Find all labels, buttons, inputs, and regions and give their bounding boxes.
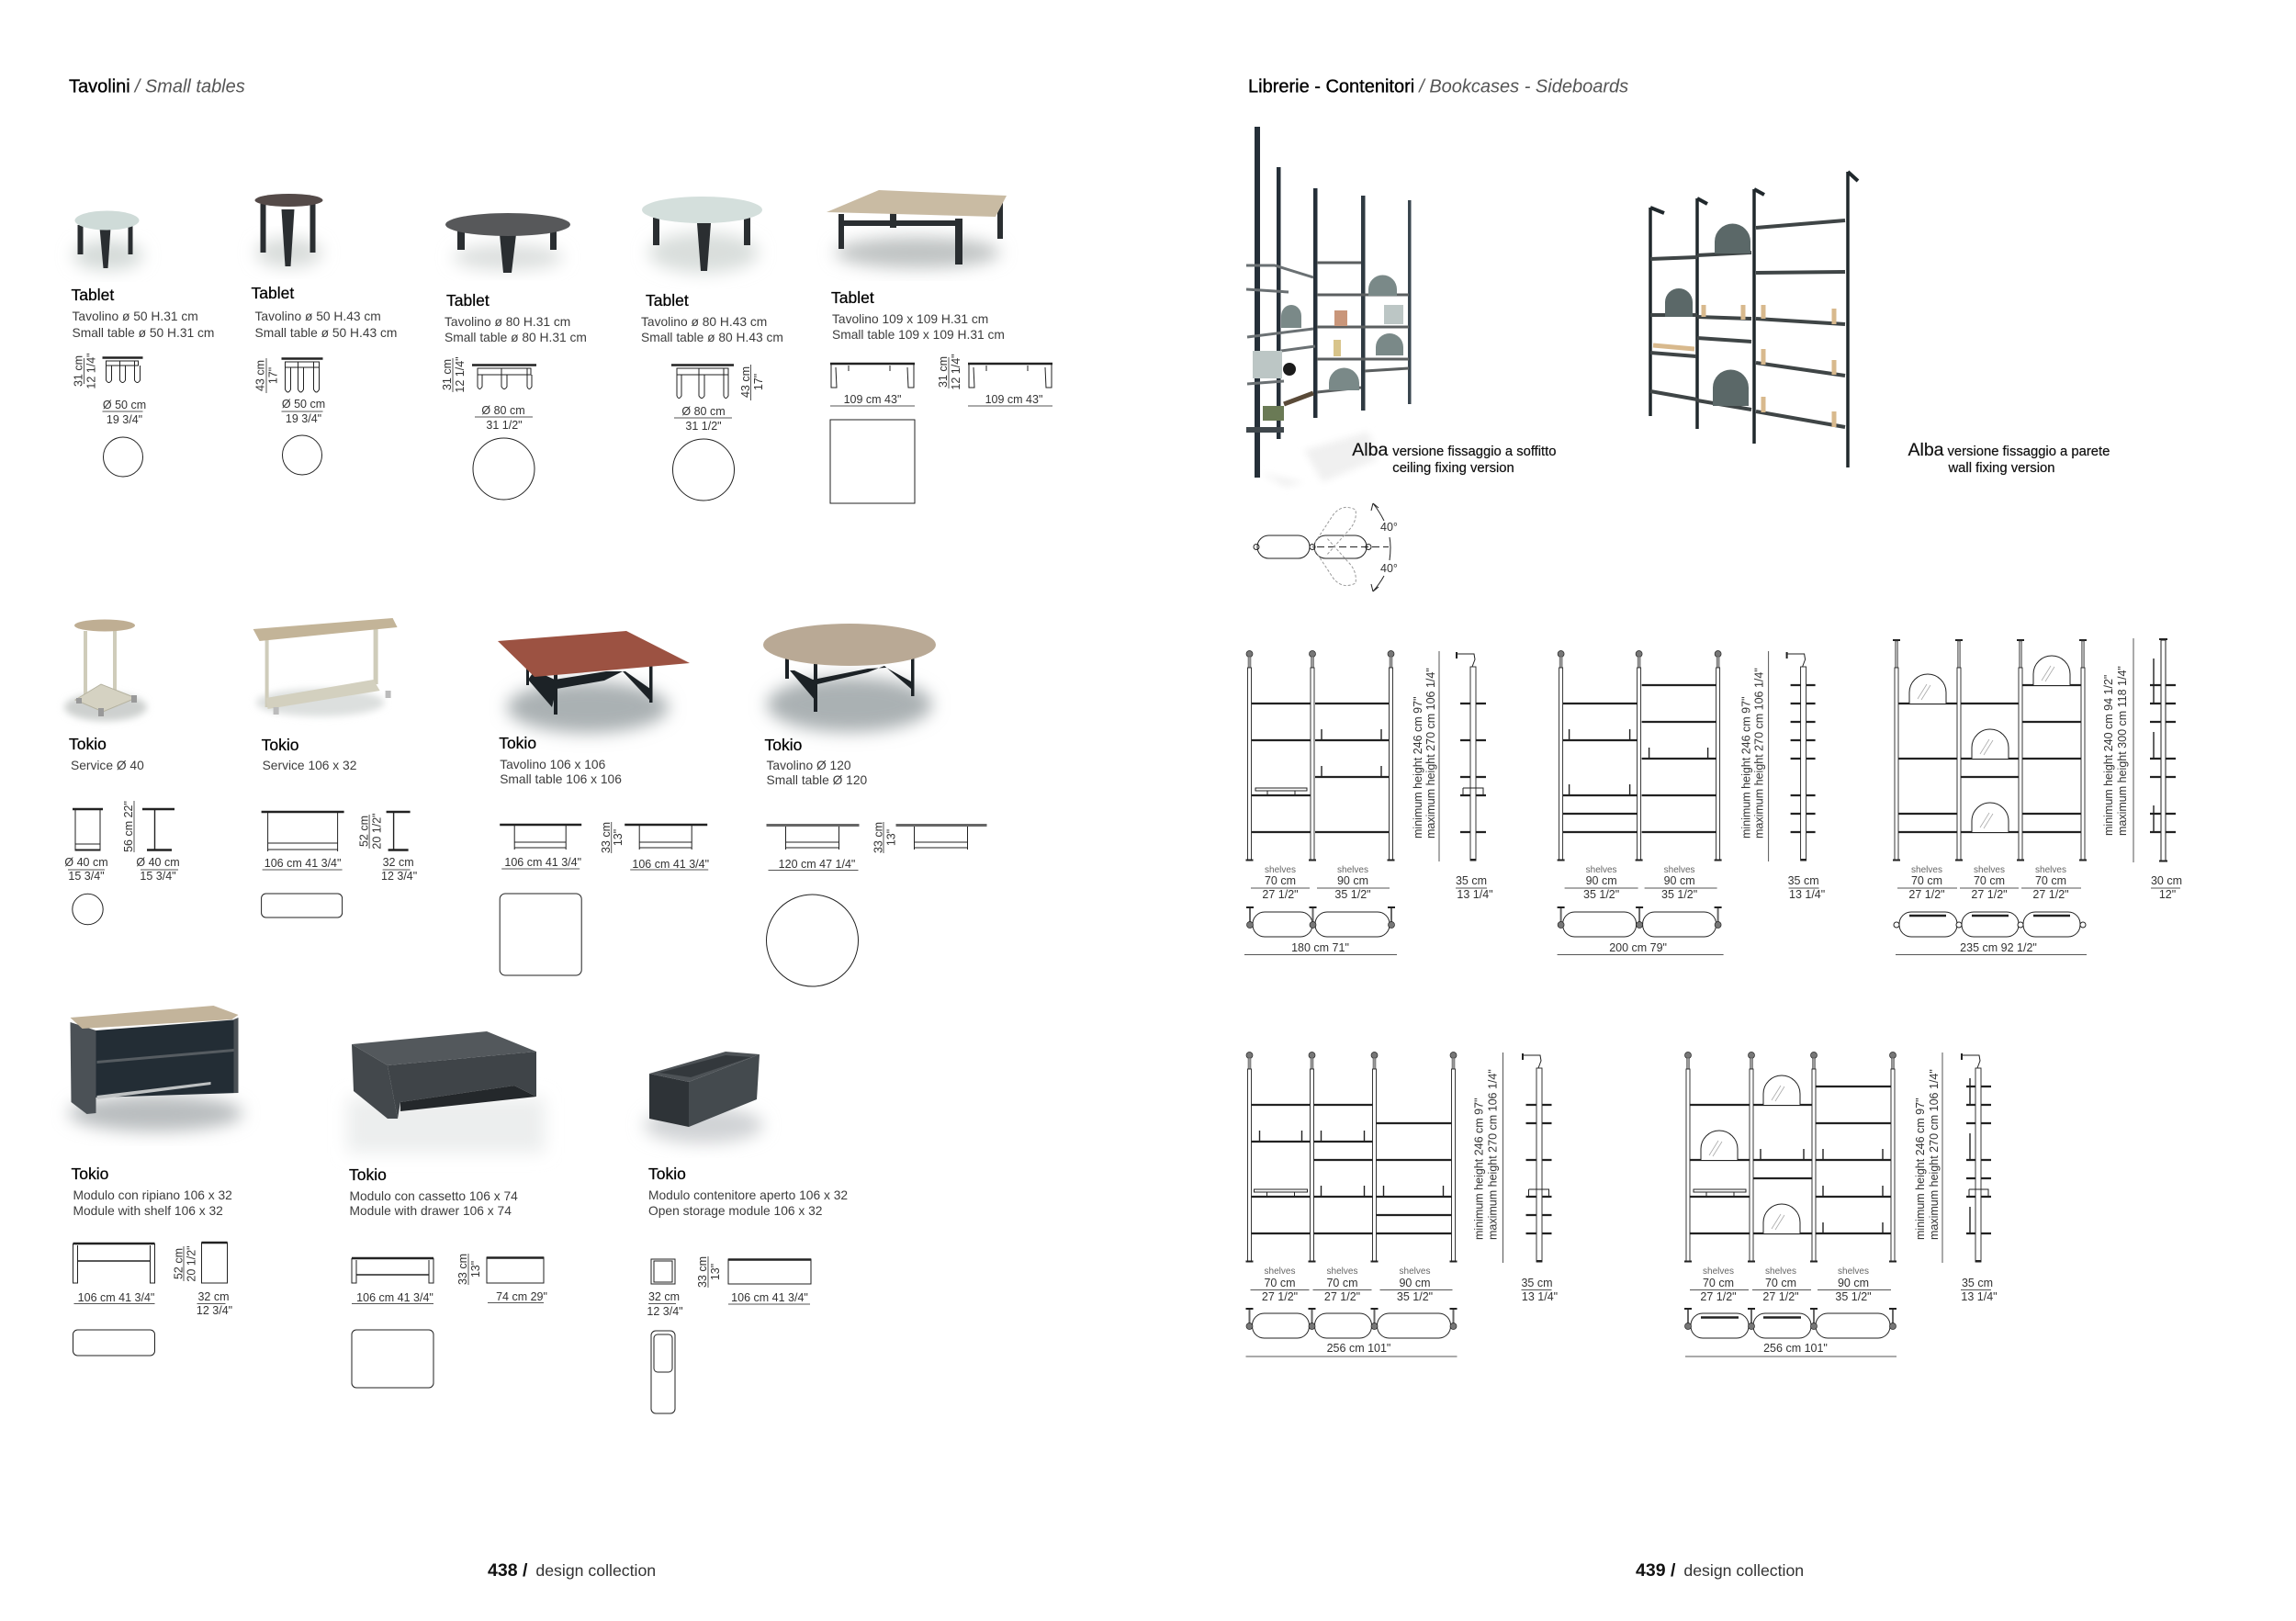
drawing: side view and dimensions: 17" bbox=[752, 374, 765, 390]
drawing: bookcase 180 cm: shelves bbox=[1337, 865, 1368, 875]
caption: Alba ceiling fixing: versione fissaggio a soffitto bbox=[1392, 445, 1557, 459]
drawing: front and side views: 13" bbox=[709, 1264, 722, 1280]
drawing: bookcase 180 cm: 13 1/4" bbox=[1457, 888, 1493, 901]
drawing: side view and dimensions: 12 1/4" bbox=[84, 353, 97, 389]
drawing: two side views: 13" bbox=[885, 829, 898, 846]
drawing: bookcase 180 cm: shelves bbox=[1265, 865, 1296, 875]
drawing: bookcase 235 cm with mirrors: 30 cm bbox=[2151, 874, 2182, 887]
drawing: side view and dimensions bbox=[671, 365, 765, 433]
drawing: side view and dimensions: 31 cm bbox=[72, 355, 84, 387]
caption: Alba wall fixing: Alba bbox=[1908, 440, 1944, 460]
heading: Librerie - Contenitori / Bookcases - Sideboards: Librerie - Contenitori/ Bookcases - Sideboards bbox=[1248, 77, 1628, 97]
drawing: side view and dimensions: Ø 50 cm bbox=[103, 399, 146, 411]
drawing: bookcase 256 cm with mirrors: shelves bbox=[1703, 1266, 1734, 1277]
drawing: two side views: 33 cm bbox=[872, 822, 885, 853]
product: Tablet 109 x 109 bbox=[827, 190, 1052, 503]
drawing: two side views and dimensions: 31 cm bbox=[937, 356, 950, 388]
product: Tablet 80 H31: Small table ø 80 H.31 cm bbox=[445, 331, 587, 344]
product: Tokio open storage module: Tokio bbox=[648, 1165, 686, 1183]
plan: circle bbox=[672, 439, 735, 501]
product: Tablet 109 x 109: Tablet bbox=[831, 288, 874, 307]
product: Tablet 50 H43: Tablet bbox=[252, 284, 294, 302]
drawing: bookcase 256 cm with mirrors: 70 cm bbox=[1703, 1277, 1734, 1289]
drawing: bookcase 256 cm: 27 1/2" bbox=[1324, 1290, 1360, 1303]
photo: module with shelf bbox=[68, 1006, 242, 1131]
product: Tokio Ø 120: Tokio bbox=[764, 736, 802, 754]
plan: circle bbox=[103, 437, 143, 477]
drawing: front and side views: 56 cm 22" bbox=[122, 801, 135, 852]
drawing: front and side views: 20 1/2" bbox=[186, 1245, 198, 1282]
photo: open storage module bbox=[644, 1052, 763, 1143]
photo: round wood table bbox=[763, 624, 936, 732]
drawing: bookcase 235 cm with mirrors: maximum height 300 cm 118 1/4" bbox=[2116, 666, 2129, 836]
product: Tokio Service 40 bbox=[64, 619, 180, 925]
drawing: bookcase 180 cm: minimum height 246 cm 97" bbox=[1412, 696, 1424, 839]
drawing: bookcase 256 cm with mirrors: minimum height 246 cm 97" bbox=[1914, 1098, 1927, 1240]
drawing: side view and dimensions bbox=[253, 358, 325, 425]
drawing: front and side views: 52 cm bbox=[358, 816, 371, 847]
drawing: bookcase 256 cm with mirrors: 27 1/2" bbox=[1700, 1290, 1737, 1303]
drawing: bookcase 235 cm with mirrors: shelves bbox=[1974, 865, 2005, 875]
drawing: bookcase 200 cm: 35 cm bbox=[1788, 874, 1819, 887]
photo: round side table on pole bbox=[64, 619, 147, 721]
drawing: front and side views: 15 3/4" bbox=[140, 870, 176, 883]
product: Tablet 50 H31 bbox=[72, 211, 214, 477]
diagram: rotation 40 degrees bbox=[1254, 503, 1398, 591]
drawing: bookcase 200 cm: 90 cm bbox=[1664, 874, 1695, 887]
product: Tablet 50 H31: Tavolino ø 50 H.31 cm bbox=[72, 310, 198, 323]
drawing: front and side views bbox=[352, 1254, 547, 1304]
product: Tokio Ø 120 bbox=[763, 624, 986, 986]
diagram: rotation 40 degrees: 40° bbox=[1380, 562, 1398, 575]
drawing: front and side views: 32 cm bbox=[648, 1290, 680, 1303]
drawing: bookcase 256 cm: shelves bbox=[1265, 1266, 1295, 1277]
product: Tokio open storage module bbox=[644, 1052, 848, 1413]
drawing: bookcase 235 cm with mirrors: 70 cm bbox=[1974, 874, 2005, 887]
drawing: bookcase 256 cm with mirrors: shelves bbox=[1838, 1266, 1869, 1277]
drawing: bookcase 235 cm with mirrors: 235 cm 92 1/2" bbox=[1960, 941, 2037, 954]
drawing: bookcase 200 cm: shelves bbox=[1586, 865, 1617, 875]
drawing: side view and dimensions: Ø 50 cm bbox=[282, 398, 325, 411]
drawing: bookcase 256 cm bbox=[1245, 1053, 1558, 1356]
drawing: bookcase 256 cm: 256 cm 101" bbox=[1327, 1342, 1390, 1355]
drawing: side view and dimensions: 31 1/2" bbox=[486, 419, 523, 432]
drawing: side view and dimensions: 19 3/4" bbox=[286, 412, 321, 425]
drawing: bookcase 256 cm: 13 1/4" bbox=[1522, 1290, 1558, 1303]
drawing: side view and dimensions: Ø 80 cm bbox=[681, 405, 726, 418]
product: Tokio Ø 120: Tavolino Ø 120 bbox=[766, 759, 851, 772]
drawing: front and side views: 106 cm 41 3/4" bbox=[356, 1291, 433, 1304]
product: Tokio Service 40: Tokio bbox=[69, 735, 107, 753]
drawing: bookcase 200 cm: 35 1/2" bbox=[1583, 888, 1619, 901]
drawing: side view and dimensions: 31 1/2" bbox=[685, 420, 722, 433]
drawing: two side views: 120 cm 47 1/4" bbox=[779, 858, 855, 871]
drawing: bookcase 180 cm: 27 1/2" bbox=[1262, 888, 1299, 901]
drawing: bookcase 256 cm: 35 cm bbox=[1521, 1277, 1553, 1289]
drawing: side view and dimensions bbox=[441, 356, 536, 432]
product: Tokio 106 x 106: Small table 106 x 106 bbox=[500, 772, 622, 786]
product: Tablet 50 H43: Small table ø 50 H.43 cm bbox=[255, 326, 397, 340]
drawing: bookcase 235 cm with mirrors: minimum height 240 cm 94 1/2" bbox=[2102, 675, 2115, 836]
page: bookcases sideboards bbox=[1244, 77, 2182, 1581]
product: Tablet 80 H43: Small table ø 80 H.43 cm bbox=[641, 331, 783, 344]
drawing: bookcase 235 cm with mirrors: 27 1/2" bbox=[1971, 888, 2008, 901]
photo: square wood table bbox=[827, 190, 1007, 268]
drawing: side view and dimensions: 31 cm bbox=[441, 359, 454, 390]
drawing: front and side views: 52 cm bbox=[173, 1248, 186, 1279]
product: Tablet 80 H31 bbox=[441, 213, 587, 500]
photo: module with drawer bbox=[347, 1031, 545, 1153]
drawing: bookcase 256 cm: shelves bbox=[1327, 1266, 1357, 1277]
drawing: bookcase 180 cm: maximum height 270 cm 106 1/4" bbox=[1424, 668, 1437, 839]
product: Tokio open storage module: Open storage module 106 x 32 bbox=[648, 1204, 822, 1218]
drawing: two side views bbox=[766, 822, 986, 871]
product: Tokio module with shelf: Modulo con ripiano 106 x 32 bbox=[73, 1188, 232, 1202]
drawing: bookcase 256 cm with mirrors: shelves bbox=[1765, 1266, 1796, 1277]
drawing: bookcase 256 cm: 90 cm bbox=[1399, 1277, 1431, 1289]
drawing: front and side views: 12 3/4" bbox=[197, 1304, 232, 1317]
drawing: side view and dimensions bbox=[72, 353, 146, 426]
drawing: front and side views: Ø 40 cm bbox=[64, 856, 108, 869]
drawing: bookcase 200 cm: shelves bbox=[1664, 865, 1695, 875]
drawing: bookcase 256 cm with mirrors: maximum height 270 cm 106 1/4" bbox=[1928, 1069, 1941, 1240]
photo: low dark round table bbox=[445, 213, 570, 273]
drawing: two side views: 33 cm bbox=[600, 822, 613, 853]
product: Tablet 109 x 109: Small table 109 x 109 H.31 cm bbox=[832, 328, 1005, 342]
drawing: two side views and dimensions: 12 1/4" bbox=[950, 354, 962, 390]
drawing: bookcase 180 cm: 180 cm 71" bbox=[1291, 941, 1349, 954]
product: Tablet 80 H43: Tavolino ø 80 H.43 cm bbox=[641, 315, 767, 329]
product: Tokio module with drawer: Tokio bbox=[349, 1165, 387, 1184]
product: Tablet 80 H43: Tablet bbox=[646, 291, 689, 310]
drawing: bookcase 235 cm with mirrors: 27 1/2" bbox=[2032, 888, 2069, 901]
drawing: bookcase 180 cm: 35 1/2" bbox=[1334, 888, 1371, 901]
caption: Alba ceiling fixing bbox=[1352, 440, 1557, 476]
caption: Alba wall fixing bbox=[1908, 440, 2110, 476]
plan: rounded rectangle bbox=[262, 894, 343, 917]
drawing: bookcase 256 cm: shelves bbox=[1400, 1266, 1430, 1277]
drawing: side view and dimensions: 43 cm bbox=[253, 360, 266, 391]
drawing: side view and dimensions: 19 3/4" bbox=[107, 413, 142, 426]
product: Tokio module with shelf: Tokio bbox=[72, 1165, 108, 1183]
product: Tokio 106 x 106: Tavolino 106 x 106 bbox=[500, 758, 606, 771]
drawing: front and side views: 32 cm bbox=[197, 1290, 230, 1303]
product: Tokio Ø 120: Small table Ø 120 bbox=[766, 773, 867, 787]
caption: Alba wall fixing: wall fixing version bbox=[1947, 461, 2054, 476]
drawing: bookcase 256 cm with mirrors: 27 1/2" bbox=[1762, 1290, 1799, 1303]
caption: Alba ceiling fixing: ceiling fixing version bbox=[1392, 461, 1514, 476]
drawing: bookcase 256 cm: 35 1/2" bbox=[1397, 1290, 1433, 1303]
drawing: two side views and dimensions: 109 cm 43" bbox=[985, 393, 1042, 406]
drawing: front and side views: Ø 40 cm bbox=[136, 856, 180, 869]
drawing: bookcase 200 cm: 90 cm bbox=[1586, 874, 1617, 887]
caption: Alba ceiling fixing: Alba bbox=[1352, 440, 1388, 460]
drawing: bookcase 256 cm: minimum height 246 cm 97" bbox=[1473, 1098, 1486, 1240]
drawing: front and side views: 20 1/2" bbox=[371, 813, 384, 850]
drawing: side view and dimensions: 12 1/4" bbox=[454, 356, 467, 393]
footer: page 438: 438 / design collection bbox=[488, 1560, 656, 1581]
drawing: bookcase 200 cm: 35 1/2" bbox=[1661, 888, 1697, 901]
product: Tokio module with drawer: Modulo con cassetto 106 x 74 bbox=[349, 1189, 518, 1203]
plan: rounded square bbox=[500, 894, 581, 975]
drawing: side view and dimensions: 43 cm bbox=[739, 366, 752, 398]
photo: square red wood table bbox=[498, 631, 690, 733]
drawing: two side views: 106 cm 41 3/4" bbox=[504, 856, 581, 869]
drawing: bookcase 235 cm with mirrors: shelves bbox=[2035, 865, 2066, 875]
drawing: front and side views: 33 cm bbox=[456, 1254, 469, 1285]
product: Tablet 80 H43 bbox=[641, 197, 783, 501]
drawing: bookcase 256 cm with mirrors: 70 cm bbox=[1765, 1277, 1796, 1289]
drawing: front and side views: 13" bbox=[469, 1261, 482, 1278]
diagram: rotation 40 degrees: 40° bbox=[1380, 521, 1398, 534]
plan: rounded rectangle bbox=[352, 1330, 433, 1388]
drawing: side view and dimensions: Ø 80 cm bbox=[481, 404, 525, 417]
drawing: front and side views: 106 cm 41 3/4" bbox=[731, 1291, 808, 1304]
drawing: front and side views bbox=[64, 801, 180, 883]
product: Tokio open storage module: Modulo contenitore aperto 106 x 32 bbox=[648, 1188, 848, 1202]
drawing: two side views: 13" bbox=[612, 829, 625, 846]
product: Tablet 50 H43: Tavolino ø 50 H.43 cm bbox=[255, 310, 381, 323]
page: small tables bbox=[64, 77, 1052, 1581]
drawing: front and side views: 74 cm 29" bbox=[496, 1290, 547, 1303]
drawing: bookcase 235 cm with mirrors: 12" bbox=[2159, 888, 2176, 901]
drawing: bookcase 235 cm with mirrors bbox=[1893, 638, 2182, 955]
drawing: bookcase 235 cm with mirrors: 27 1/2" bbox=[1908, 888, 1945, 901]
drawing: bookcase 200 cm: maximum height 270 cm 106 1/4" bbox=[1753, 668, 1766, 839]
product: Tablet 50 H31: Tablet bbox=[72, 286, 114, 304]
drawing: front and side views: 33 cm bbox=[696, 1256, 709, 1288]
heading: Tavolini / Small tables: Tavolini/ Small tables bbox=[69, 77, 245, 97]
plan: tall rounded rectangle with inner opening bbox=[651, 1331, 675, 1413]
drawing: two side views and dimensions bbox=[830, 354, 1052, 406]
product: Tokio 106 x 106: Tokio bbox=[499, 734, 536, 752]
product: Tokio Service 106 x 32 bbox=[253, 618, 417, 917]
plan: circle bbox=[283, 435, 321, 475]
drawing: bookcase 180 cm bbox=[1244, 650, 1493, 955]
drawing: front and side views bbox=[262, 812, 417, 883]
drawing: side view and dimensions: 17" bbox=[266, 367, 279, 384]
product: Tokio module with drawer bbox=[347, 1031, 547, 1388]
product: Tablet 80 H31: Tavolino ø 80 H.31 cm bbox=[445, 315, 570, 329]
photo: tall glass round table bbox=[642, 197, 762, 273]
drawing: bookcase 256 cm with mirrors: 35 1/2" bbox=[1835, 1290, 1872, 1303]
drawing: front and side views bbox=[73, 1243, 232, 1317]
drawing: front and side views: 32 cm bbox=[383, 856, 414, 869]
plan: circle bbox=[766, 895, 858, 986]
drawing: bookcase 180 cm: 90 cm bbox=[1337, 874, 1368, 887]
drawing: front and side views bbox=[647, 1256, 811, 1318]
drawing: two side views bbox=[500, 822, 709, 871]
drawing: bookcase 200 cm: minimum height 246 cm 97" bbox=[1740, 696, 1753, 839]
photo: Alba wall fixing bookcase bbox=[1650, 172, 1858, 467]
product: Tablet 50 H43 bbox=[252, 194, 397, 475]
drawing: front and side views: 15 3/4" bbox=[68, 870, 105, 883]
drawing: bookcase 256 cm with mirrors: 13 1/4" bbox=[1961, 1290, 1998, 1303]
drawing: bookcase 256 cm with mirrors: 90 cm bbox=[1838, 1277, 1869, 1289]
drawing: bookcase 200 cm: 200 cm 79" bbox=[1609, 941, 1667, 954]
footer: page 439: 439 / design collection bbox=[1636, 1560, 1804, 1581]
plan: circle bbox=[73, 894, 103, 925]
drawing: bookcase 235 cm with mirrors: 70 cm bbox=[2035, 874, 2066, 887]
product: Tokio module with drawer: Module with drawer 106 x 74 bbox=[349, 1204, 512, 1218]
drawing: front and side views: 12 3/4" bbox=[647, 1305, 683, 1318]
drawing: bookcase 256 cm: 70 cm bbox=[1264, 1277, 1296, 1289]
plan: square bbox=[830, 420, 915, 503]
product: Tokio Service 40: Service Ø 40 bbox=[71, 759, 144, 772]
photo: small tall round table bbox=[255, 194, 323, 267]
product: Tokio module with shelf bbox=[68, 1006, 242, 1356]
drawing: bookcase 256 cm with mirrors: 35 cm bbox=[1962, 1277, 1993, 1289]
drawing: front and side views: 12 3/4" bbox=[381, 870, 417, 883]
drawing: bookcase 235 cm with mirrors: shelves bbox=[1911, 865, 1942, 875]
drawing: bookcase 180 cm: 35 cm bbox=[1456, 874, 1487, 887]
drawing: bookcase 256 cm with mirrors bbox=[1684, 1053, 1998, 1356]
drawing: two side views: 106 cm 41 3/4" bbox=[632, 858, 709, 871]
product: Tablet 109 x 109: Tavolino 109 x 109 H.31 cm bbox=[832, 312, 988, 326]
drawing: bookcase 235 cm with mirrors: 70 cm bbox=[1911, 874, 1942, 887]
photo: console table bbox=[253, 618, 398, 716]
drawing: front and side views: 106 cm 41 3/4" bbox=[78, 1291, 154, 1304]
product: Tablet 80 H31: Tablet bbox=[446, 291, 490, 310]
drawing: two side views and dimensions: 109 cm 43" bbox=[844, 393, 901, 406]
product: Tokio module with shelf: Module with shelf 106 x 32 bbox=[73, 1204, 223, 1218]
drawing: front and side views: 106 cm 41 3/4" bbox=[264, 857, 341, 870]
drawing: bookcase 256 cm: 70 cm bbox=[1326, 1277, 1358, 1289]
photo: Alba ceiling fixing bookcase bbox=[1246, 127, 1411, 487]
drawing: bookcase 200 cm: 13 1/4" bbox=[1789, 888, 1825, 901]
plan: circle bbox=[473, 438, 535, 500]
plan: rounded rectangle bbox=[73, 1330, 154, 1356]
drawing: bookcase 256 cm with mirrors: 256 cm 101" bbox=[1763, 1342, 1828, 1355]
drawing: bookcase 200 cm bbox=[1558, 650, 1825, 955]
drawing: bookcase 256 cm: 27 1/2" bbox=[1262, 1290, 1298, 1303]
product: Tokio Service 106 x 32: Tokio bbox=[262, 736, 298, 754]
photo: small round table bbox=[73, 211, 143, 270]
product: Tokio Service 106 x 32: Service 106 x 32 bbox=[263, 759, 356, 772]
product: Tablet 50 H31: Small table ø 50 H.31 cm bbox=[72, 326, 214, 340]
drawing: bookcase 180 cm: 70 cm bbox=[1265, 874, 1296, 887]
product: Tokio 106 x 106 bbox=[498, 631, 709, 975]
drawing: bookcase 256 cm: maximum height 270 cm 106 1/4" bbox=[1486, 1069, 1499, 1240]
caption: Alba wall fixing: versione fissaggio a parete bbox=[1947, 445, 2110, 459]
